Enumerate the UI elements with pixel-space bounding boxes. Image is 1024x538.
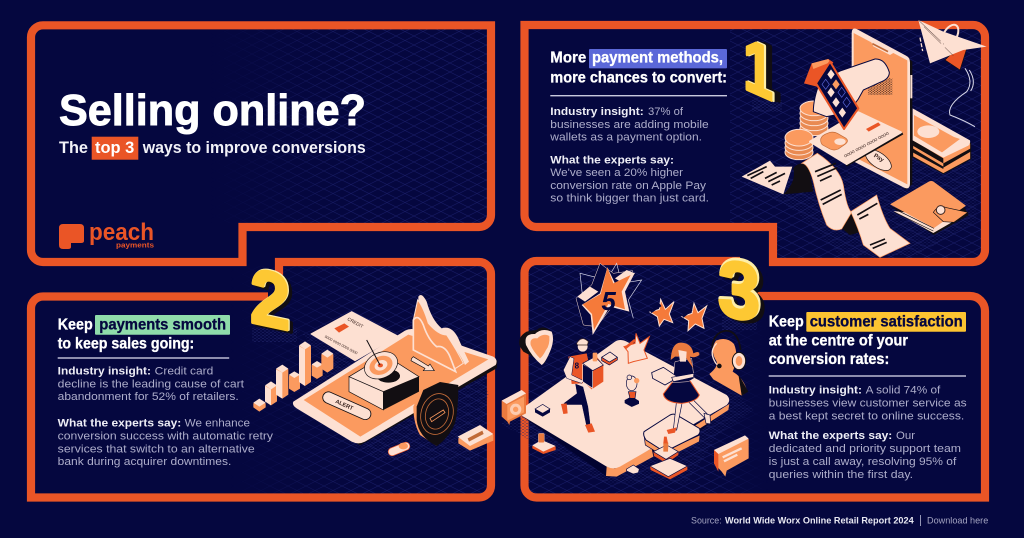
text: experts say xyxy=(550,154,709,205)
text: experts say: What the experts say: xyxy=(58,417,181,429)
support agent headset xyxy=(709,331,748,396)
shield xyxy=(413,382,458,446)
number 2: 2 xyxy=(254,254,294,349)
small boxes on platform xyxy=(535,352,617,417)
subheading: The xyxy=(59,138,88,157)
platform xyxy=(518,340,730,477)
delivery person: 8 xyxy=(575,361,580,370)
coins xyxy=(785,101,828,160)
number 3: 3 xyxy=(723,245,765,341)
text: experts say: We enhance xyxy=(185,417,250,429)
illustration: reviews and support platform xyxy=(500,263,753,483)
heading: payment methods: More xyxy=(550,50,587,67)
text: experts say: conversion rate on Apple Pay xyxy=(550,180,706,192)
small platform xyxy=(644,435,700,458)
text: industry insight: businesses view customer service as xyxy=(769,398,967,410)
money stack xyxy=(913,108,971,174)
left monitor xyxy=(502,390,526,425)
heading: customer satisfaction: Keep xyxy=(769,314,804,331)
bar chart xyxy=(253,341,333,412)
receipt xyxy=(742,153,910,257)
text: experts say: bank during acquirer downtimes. xyxy=(58,456,231,468)
chip tile xyxy=(458,425,493,451)
text: experts say xyxy=(769,430,961,481)
text: experts say: services that switch to an alternative xyxy=(58,443,255,455)
phone: Pay xyxy=(872,153,885,164)
heading: payments smooth: to keep sales going: xyxy=(58,336,194,353)
logo: peach payments: peach xyxy=(89,219,154,246)
wallet xyxy=(889,181,969,235)
phone xyxy=(852,29,912,190)
trophy xyxy=(624,375,639,407)
heading: payments smooth: Keep xyxy=(58,316,93,333)
credit card xyxy=(810,112,903,167)
heading: customer satisfaction: at the centre of your xyxy=(769,332,908,349)
number 1: 1 xyxy=(745,22,775,117)
heading: customer satisfaction xyxy=(769,312,966,368)
panel: title xyxy=(31,25,491,262)
credit card: 0000 0000 0000 0000 xyxy=(324,335,358,355)
heading: customer satisfaction: conversion rates: xyxy=(769,351,889,368)
heading: selling online: Selling online? xyxy=(59,86,366,135)
text: industry insight xyxy=(58,365,245,403)
number 1: 1 xyxy=(743,22,773,118)
heading: payments smooth xyxy=(58,315,230,353)
credit card: CREDIT xyxy=(347,316,364,329)
subheading xyxy=(59,137,366,160)
card terminal xyxy=(804,59,858,129)
text: experts say xyxy=(58,417,273,468)
big star: 5 xyxy=(601,286,616,316)
text: industry insight: decline is the leading cause of cart xyxy=(58,378,245,390)
number 2: 2 xyxy=(251,251,291,347)
text: experts say: so think bigger than just card. xyxy=(550,193,709,205)
text: experts say: conversion success with automatic retry xyxy=(58,430,273,442)
big star xyxy=(576,263,642,335)
illustration: phone, card and receipts xyxy=(740,20,987,257)
illustration: alert phone and target xyxy=(248,295,498,460)
hand xyxy=(813,59,889,117)
footer source: Download here xyxy=(927,515,988,525)
arrow xyxy=(411,357,434,371)
panel: customer satisfaction xyxy=(500,241,985,497)
text: industry insight: A solid 74% of xyxy=(866,385,941,397)
number 1: 1 xyxy=(751,23,781,118)
subheading: top 3 xyxy=(95,138,134,157)
text: industry insight: 37% of xyxy=(648,106,684,118)
phone xyxy=(293,329,498,445)
text: industry insight xyxy=(549,106,709,144)
delivery person xyxy=(561,339,603,433)
toggle pill xyxy=(387,441,411,457)
text: experts say: What the experts say: xyxy=(550,154,674,166)
heading: payments smooth: payments smooth xyxy=(99,316,226,333)
text: industry insight: a best kept secret to online success. xyxy=(769,410,964,422)
text: industry insight: Credit card xyxy=(155,365,213,377)
text: experts say: dedicated and priority support team xyxy=(769,443,961,455)
small stars xyxy=(624,299,707,363)
panel: payment methods xyxy=(524,19,987,262)
number 1: 1 xyxy=(748,22,778,118)
logo: peach payments: payments xyxy=(116,241,154,250)
number 3: 3 xyxy=(719,242,761,337)
text: industry insight: abandonment for 52% of retailers. xyxy=(58,391,239,403)
panel: payments smooth xyxy=(27,251,498,498)
small tables xyxy=(532,433,687,479)
alert pill: ALERT xyxy=(334,399,354,412)
heading: payment methods xyxy=(550,49,727,86)
footer source: World Wide Worx Online Retail Report 2024 xyxy=(725,515,914,525)
subheading: ways to improve conversions xyxy=(142,138,366,157)
number 2: 2 xyxy=(250,252,290,347)
text: industry insight: Industry insight: xyxy=(769,385,862,397)
heading: payment methods: payment methods, xyxy=(592,50,723,67)
text: industry insight: Industry insight: xyxy=(58,365,151,377)
heading: payment methods: more chances to convert: xyxy=(550,69,727,86)
text: industry insight xyxy=(769,385,967,422)
credit card: 0000 0000 0000 0000 xyxy=(843,130,891,159)
heading: customer satisfaction: customer satisfaction xyxy=(810,314,963,331)
footer source: Source: xyxy=(691,515,722,525)
number 3: 3 xyxy=(718,243,760,339)
text: industry insight: Industry insight: xyxy=(550,106,644,118)
person with laptop xyxy=(652,343,711,434)
target on box xyxy=(349,339,419,410)
area chart xyxy=(413,295,469,372)
text: industry insight: wallets as a payment option. xyxy=(549,132,702,144)
text: experts say: Our xyxy=(896,430,915,442)
text: industry insight: businesses are adding mobile xyxy=(550,119,709,131)
text: experts say: What the experts say: xyxy=(769,430,892,442)
text: experts say: We've seen a 20% higher xyxy=(550,167,683,179)
alert pill xyxy=(321,390,373,421)
text: experts say: is just a call away, resolving 95% of xyxy=(769,456,957,468)
heart xyxy=(519,327,553,365)
paper plane xyxy=(918,20,987,127)
footer source xyxy=(691,515,988,526)
logo: peach payments xyxy=(59,219,154,250)
chat monitor xyxy=(714,435,749,477)
text: experts say: queries within the first day. xyxy=(769,469,913,481)
credit card xyxy=(311,312,398,361)
